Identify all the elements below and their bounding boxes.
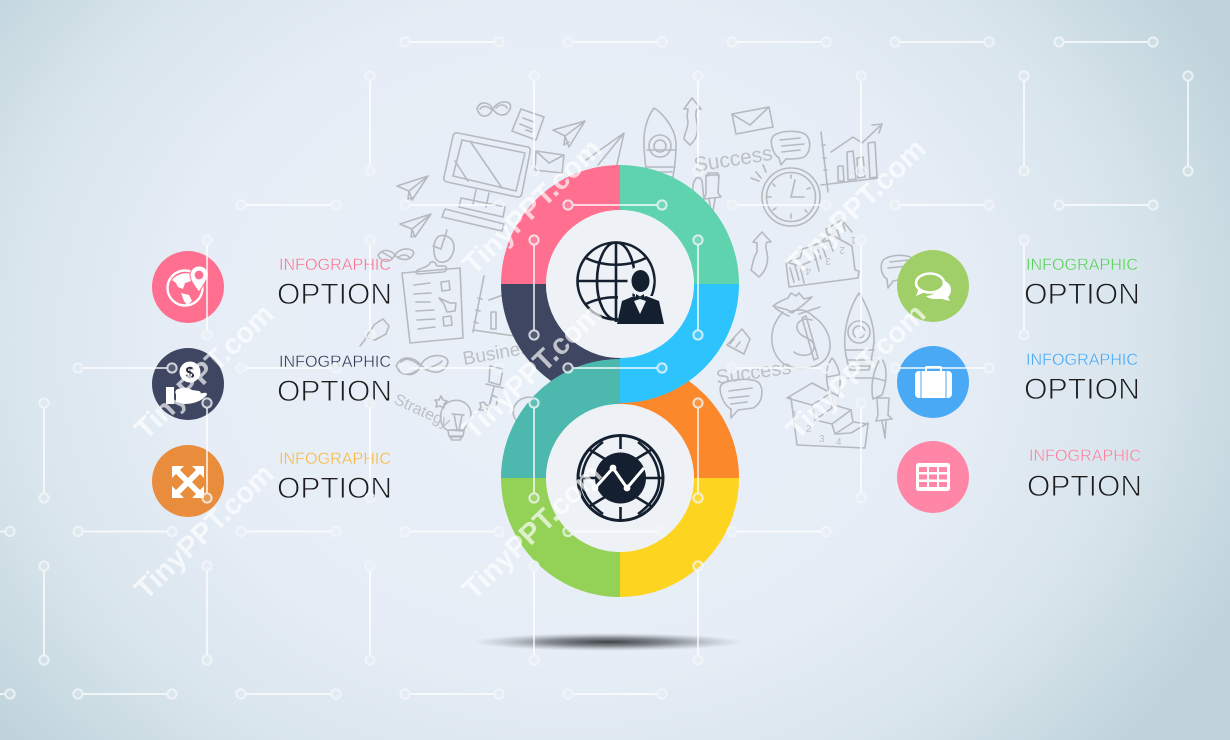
doodle: business pin bbox=[435, 366, 503, 413]
doodle: infinity big bbox=[396, 356, 448, 375]
doodle: tape bbox=[727, 329, 750, 354]
doodle label: stair numbers bbox=[792, 234, 856, 448]
doodle label: stair numbers: 1 bbox=[850, 234, 856, 245]
watermark text: TinyPPT.com bbox=[781, 298, 932, 446]
doodle: bulb bbox=[441, 400, 471, 440]
doodle label: stair numbers: 4 bbox=[805, 265, 811, 276]
doodle label: stair numbers: 2 bbox=[806, 424, 812, 435]
doodle: bubble far right bbox=[881, 255, 916, 288]
doodle: pins bbox=[360, 319, 389, 346]
doodle: success bubble bbox=[720, 379, 762, 418]
doodle: monitor bbox=[442, 133, 530, 231]
inner disc top bbox=[546, 210, 694, 358]
doodle: stairs bbox=[786, 220, 859, 287]
heading: OPTION bbox=[1027, 470, 1142, 503]
segment: pink bbox=[501, 165, 620, 284]
inner disc bottom bbox=[546, 404, 694, 552]
right option 3 bbox=[897, 441, 1142, 513]
watermark text: TinyPPT.com bbox=[129, 458, 280, 606]
segment: mint bbox=[620, 165, 739, 284]
watermark text: TinyPPT.com bbox=[457, 133, 608, 281]
heading: OPTION bbox=[277, 375, 392, 408]
watermark text: TinyPPT.com bbox=[457, 298, 608, 446]
doodle: mouse bbox=[433, 230, 454, 262]
icon: globe and pin on pink circle bbox=[152, 251, 224, 323]
doodle: arrow up bbox=[684, 98, 701, 145]
icon: table on pink circle bbox=[897, 441, 969, 513]
icon: expand arrows on orange circle bbox=[152, 445, 224, 517]
doodle: paper plane large bbox=[586, 133, 624, 178]
segment: navy bbox=[501, 284, 620, 403]
label: INFOGRAPHIC bbox=[279, 255, 391, 274]
doodle label: stair numbers: 2 bbox=[839, 244, 845, 255]
doodle: note bbox=[512, 109, 544, 140]
doodle: rocket behind pin bbox=[692, 178, 704, 201]
doodle: envelope right bbox=[732, 107, 773, 134]
doodle: infinity top bbox=[477, 102, 511, 116]
doodle: clock bbox=[762, 168, 820, 226]
doodle: pin lower right bbox=[876, 398, 892, 438]
figure eight ring bbox=[501, 165, 739, 597]
icon: briefcase on blue circle bbox=[897, 346, 969, 418]
doodle: bar chart arrow bbox=[821, 124, 882, 192]
shadow under figure eight bbox=[472, 633, 744, 651]
doodle: infinity mid bbox=[378, 249, 414, 261]
doodle: rocket top bbox=[644, 108, 676, 177]
watermark text: TinyPPT.com bbox=[457, 458, 608, 606]
heading: OPTION bbox=[277, 472, 392, 505]
doodle: small rockets bbox=[827, 358, 886, 399]
doodle: stairs lower bbox=[787, 383, 868, 448]
label: INFOGRAPHIC bbox=[279, 352, 391, 371]
doodle: ruler chart bbox=[473, 276, 515, 336]
heading: OPTION bbox=[1024, 278, 1140, 311]
doodle: money bag bbox=[772, 293, 830, 368]
label: INFOGRAPHIC bbox=[279, 449, 391, 468]
doodle label: success top: Success bbox=[692, 142, 774, 177]
left option 1 bbox=[152, 251, 392, 323]
doodle: rocket right bbox=[845, 293, 874, 370]
label: INFOGRAPHIC bbox=[1029, 446, 1141, 465]
doodle: arrow mid bbox=[751, 232, 771, 277]
right option 1 bbox=[897, 250, 1140, 322]
watermark text: TinyPPT.com bbox=[781, 133, 932, 281]
watermark text: TinyPPT.com bbox=[129, 298, 280, 446]
doodle: bubble right bbox=[771, 131, 810, 165]
doodle: planes left bbox=[397, 176, 431, 237]
label: INFOGRAPHIC bbox=[1026, 255, 1138, 274]
doodle: push pin bbox=[704, 173, 721, 217]
doodle: paper plane small bbox=[553, 121, 585, 147]
doodle label: stair numbers: 1 bbox=[792, 410, 798, 421]
watermark text bbox=[129, 133, 932, 606]
doodle label: stair numbers: 3 bbox=[825, 255, 831, 266]
doodle: clipboard bbox=[402, 262, 463, 343]
doodle label: business: Business bbox=[461, 336, 541, 370]
left option 3 bbox=[152, 445, 392, 517]
icon: globe with trend line bbox=[578, 436, 663, 520]
doodle sketches, right cluster bbox=[644, 98, 916, 448]
segment: yellow bbox=[620, 478, 739, 597]
segment: teal bbox=[501, 359, 620, 478]
label: INFOGRAPHIC bbox=[1026, 350, 1138, 369]
doodle label: strategy: Strategy bbox=[391, 391, 453, 432]
segment: lime bbox=[501, 478, 620, 597]
icon: hand holding coin on navy circle bbox=[152, 348, 224, 420]
doodle: bubble behind bbox=[513, 397, 544, 425]
doodle label: stair numbers: 4 bbox=[836, 437, 842, 448]
doodle sketches, left cluster bbox=[360, 102, 624, 440]
doodle label: success lower: Success bbox=[715, 357, 793, 389]
doodle label: stair numbers: 3 bbox=[819, 434, 825, 445]
heading: OPTION bbox=[277, 278, 392, 311]
icon: hand holding coin on navy circle: $ bbox=[186, 365, 195, 382]
icon: chat bubbles on green circle bbox=[897, 250, 969, 322]
right option 2 bbox=[897, 346, 1140, 418]
left option 2 bbox=[152, 348, 392, 420]
doodle: envelope bbox=[535, 151, 564, 173]
heading: OPTION bbox=[1024, 373, 1140, 406]
icon: globe with businessman bbox=[578, 242, 666, 326]
segment: orange bbox=[620, 359, 739, 478]
segment: sky blue bbox=[620, 284, 739, 403]
